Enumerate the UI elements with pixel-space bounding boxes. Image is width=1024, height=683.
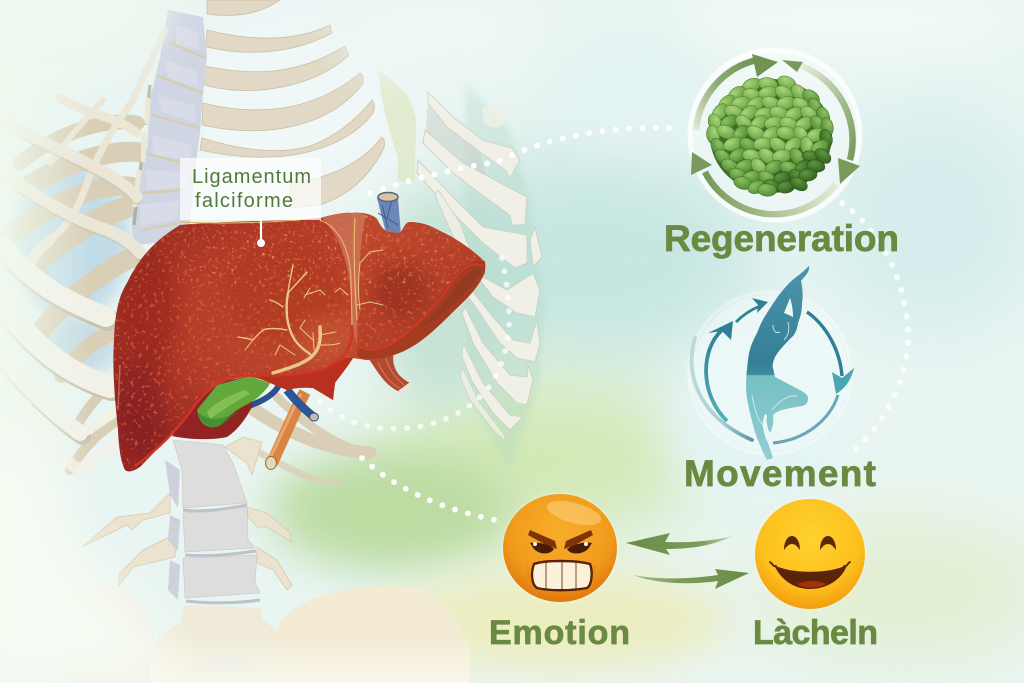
eyes xyxy=(784,536,836,550)
liver: bile duct branches xyxy=(238,250,383,373)
callout label: Ligamentum falciforme xyxy=(180,158,321,247)
heading: Emotion: Emotion xyxy=(489,614,630,652)
liver: falciform ligament band xyxy=(322,213,366,345)
dotted connector: regeneration to movement xyxy=(842,203,908,456)
pelvis xyxy=(58,582,470,683)
right rib cage xyxy=(417,80,545,470)
dotted connector: liver to movement via ribs xyxy=(314,258,509,429)
liver: right lobe shading xyxy=(352,213,485,350)
forehead highlight xyxy=(544,496,604,530)
skeleton: rib cage, spine, pelvis xyxy=(0,0,545,683)
heading: Regeneration: Regeneration xyxy=(664,218,899,259)
icon: smiling face xyxy=(754,498,866,610)
caudate lobe underside xyxy=(172,375,255,439)
hepatic ligament vessel, right xyxy=(366,350,411,393)
heading: Movement: Movement xyxy=(684,453,876,494)
inner left arrow xyxy=(706,321,733,421)
icon: regeneration cycle with bean cluster xyxy=(690,50,860,220)
dotted connector: liver to emotion xyxy=(362,458,506,522)
sternum tip xyxy=(378,70,416,183)
arrow: emotion to smile xyxy=(633,569,749,589)
mouth with teeth xyxy=(532,561,592,590)
callout label: Ligamentum falciforme: Ligamentum xyxy=(192,166,311,188)
icon: movement cycle with dancer xyxy=(689,266,854,460)
outer left arc xyxy=(692,338,752,440)
cycle arrows xyxy=(691,54,860,214)
eyes xyxy=(530,542,592,554)
liver: main edge of lower rim xyxy=(253,358,353,400)
fade veils over the skeleton xyxy=(0,0,540,683)
arrow: smile to emotion xyxy=(626,533,733,555)
small top arrow xyxy=(736,298,768,322)
gallbladder xyxy=(197,376,270,427)
lower right arc xyxy=(773,395,838,443)
upper spine xyxy=(132,10,207,245)
back ribs upper right xyxy=(200,0,384,208)
brows xyxy=(528,530,593,549)
liver: shading and speckles xyxy=(113,214,484,470)
icon: angry face xyxy=(502,493,618,603)
dotted connector: liver to regeneration xyxy=(370,128,675,193)
callout label: Ligamentum falciforme: falciforme xyxy=(195,190,293,212)
lower spine vertebrae and processes xyxy=(82,437,303,683)
cycle ring xyxy=(690,50,860,220)
dancer body highlights xyxy=(752,322,797,425)
inferior vena cava xyxy=(377,192,401,235)
dancer silhouette xyxy=(746,266,809,460)
mouth xyxy=(774,565,847,589)
bean cluster xyxy=(705,73,835,197)
back ribs left xyxy=(10,122,370,482)
right arrow xyxy=(807,312,854,394)
liver: right lobe underside xyxy=(357,261,485,359)
front ribs left xyxy=(0,30,165,470)
liver xyxy=(113,212,486,472)
heading: Lächeln: Làcheln xyxy=(753,614,878,652)
aorta and portal vein xyxy=(243,382,318,470)
